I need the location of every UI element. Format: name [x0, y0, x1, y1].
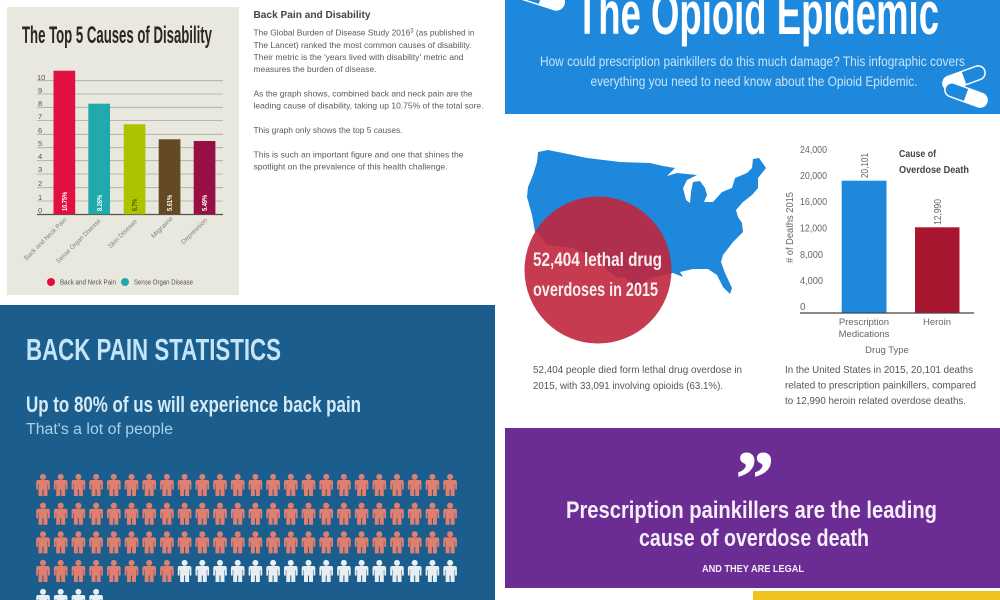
quote subtext: AND THEY ARE LEGAL	[702, 564, 804, 575]
bar: heroin	[915, 227, 960, 313]
caption: That's a lot of people	[26, 421, 173, 438]
y axis title: # of Deaths 2015	[785, 192, 796, 263]
grid lines and y axis labels: 10	[37, 73, 45, 82]
bar value labels: 5.61%	[167, 194, 174, 211]
grid lines and y axis labels	[37, 73, 223, 215]
text block: chart summary: In the United States in 2015, 20,101 deaths	[785, 364, 973, 376]
map: United States	[527, 150, 766, 294]
grid lines and y axis labels: 3	[38, 165, 42, 174]
grid lines and y axis labels: 0	[38, 206, 42, 215]
grid lines and y axis labels: 6	[38, 126, 42, 135]
panel: quote	[505, 428, 1000, 588]
body paragraphs: This is such an important figure and one that shines the	[254, 150, 464, 160]
callout: lethal overdoses circle	[524, 196, 672, 344]
x axis labels: Drug Type	[865, 345, 909, 356]
y axis labels: 24,000	[800, 145, 827, 156]
panel: top 5 causes of disability chart	[7, 7, 239, 295]
body paragraphs: measures the burden of disease.	[254, 64, 376, 74]
body paragraphs: As the graph shows, combined back and neck pain are the	[254, 88, 473, 98]
heading: Back Pain and Disability	[254, 9, 371, 21]
category labels: Sense Organ Disease	[55, 217, 103, 265]
value label: 12,990: 12,990	[933, 199, 944, 225]
text block: overdose summary: 2015, with 33,091 involving opioids (63.1%).	[533, 380, 723, 392]
x axis labels	[839, 317, 951, 356]
body paragraphs: This graph only shows the top 5 causes.	[254, 125, 402, 135]
panel: yellow strip	[753, 591, 1000, 600]
category labels: Back and Neck Pain	[23, 217, 69, 262]
panel: back pain statistics	[0, 305, 495, 600]
grid lines and y axis labels: 8	[38, 99, 42, 108]
legend: Sense Organ Disease	[134, 280, 193, 286]
bar chart: cause of overdose death	[785, 145, 974, 356]
bar value labels: 5.49%	[202, 194, 209, 211]
bar value labels	[62, 191, 209, 211]
text block: chart summary: related to prescription painkillers, compared	[785, 380, 976, 392]
y axis labels: 20,000	[800, 171, 827, 182]
category labels	[23, 215, 209, 265]
category labels: Migraine	[150, 215, 175, 240]
intro text	[540, 54, 965, 89]
icon: quotation mark: ”	[736, 437, 774, 521]
x axis labels: Heroin	[923, 317, 951, 328]
body paragraphs: The Global Burden of Disease Study 2016	[254, 28, 410, 38]
chart title: Overdose Death	[899, 165, 969, 176]
text block: chart summary	[785, 364, 976, 407]
bar value labels: 10.75%	[62, 191, 69, 211]
text block: overdose summary: 52,404 people died form lethal drug overdose in	[533, 364, 742, 376]
grid lines and y axis labels: 1	[38, 193, 42, 202]
legend	[47, 278, 193, 286]
category labels: Skin Disease	[107, 218, 139, 250]
bar: prescription medications	[842, 181, 886, 313]
body paragraphs: The Lancet) ranked the most common causes of disability.	[254, 40, 472, 50]
chart title: The Top 5 Causes of Disability	[22, 22, 212, 49]
chart title	[899, 149, 969, 176]
text block: overdose summary	[533, 364, 742, 392]
y axis labels: 8,000	[800, 250, 823, 261]
body paragraphs: leading cause of disability, taking up 10.75% of the total sore.	[254, 101, 484, 111]
intro text: everything you need to need know about the Opioid Epidemic.	[590, 74, 918, 89]
callout text: overdoses in 2015	[533, 280, 658, 301]
y axis labels: 4,000	[800, 276, 823, 287]
bars	[54, 71, 215, 214]
y axis labels: 0	[800, 302, 806, 313]
bar value labels: 6.7%	[132, 198, 139, 211]
icon: pills bottom right	[941, 64, 989, 109]
text block: chart summary: to 12,990 heroin related overdose deaths.	[785, 395, 966, 407]
body paragraphs	[254, 28, 484, 172]
y axis labels: 12,000	[800, 224, 827, 234]
callout text: 52,404 lethal drug	[533, 250, 662, 271]
panel: opioid epidemic header	[505, 0, 1000, 114]
quote text: Prescription painkillers are the leading	[566, 497, 937, 524]
grid lines and y axis labels: 4	[38, 152, 42, 161]
body paragraphs: 3	[410, 28, 414, 34]
bar value labels: 8.26%	[97, 194, 104, 211]
x axis labels: Medications	[839, 329, 890, 340]
x axis labels: Prescription	[839, 317, 889, 328]
text block: back pain and disability	[254, 9, 484, 172]
subheading: Up to 80% of us will experience back pain	[26, 392, 361, 417]
y axis labels: 16,000	[800, 197, 827, 208]
icon: pill top left	[516, 0, 566, 12]
legend: Back and Neck Pain	[60, 280, 116, 286]
chart title: Cause of	[899, 149, 937, 160]
y axis labels	[800, 145, 827, 313]
grid lines and y axis labels: 5	[38, 139, 42, 148]
pictogram: people	[36, 474, 457, 600]
axis line	[800, 312, 974, 314]
quote text	[566, 497, 937, 552]
value label: 20,101: 20,101	[860, 153, 871, 178]
body paragraphs: Their metric is the 'years lived with disability' metric and	[254, 52, 464, 62]
heading: BACK PAIN STATISTICS	[26, 332, 281, 367]
grid lines and y axis labels: 2	[38, 179, 42, 188]
quote text: cause of overdose death	[639, 525, 869, 552]
callout text	[533, 250, 662, 301]
body paragraphs: spotlight on the prevalence of this health challenge.	[254, 162, 448, 172]
grid lines and y axis labels: 7	[38, 112, 42, 121]
grid lines and y axis labels: 9	[38, 86, 42, 95]
category labels: Depression	[180, 217, 209, 246]
body paragraphs: (as published in	[414, 28, 475, 38]
